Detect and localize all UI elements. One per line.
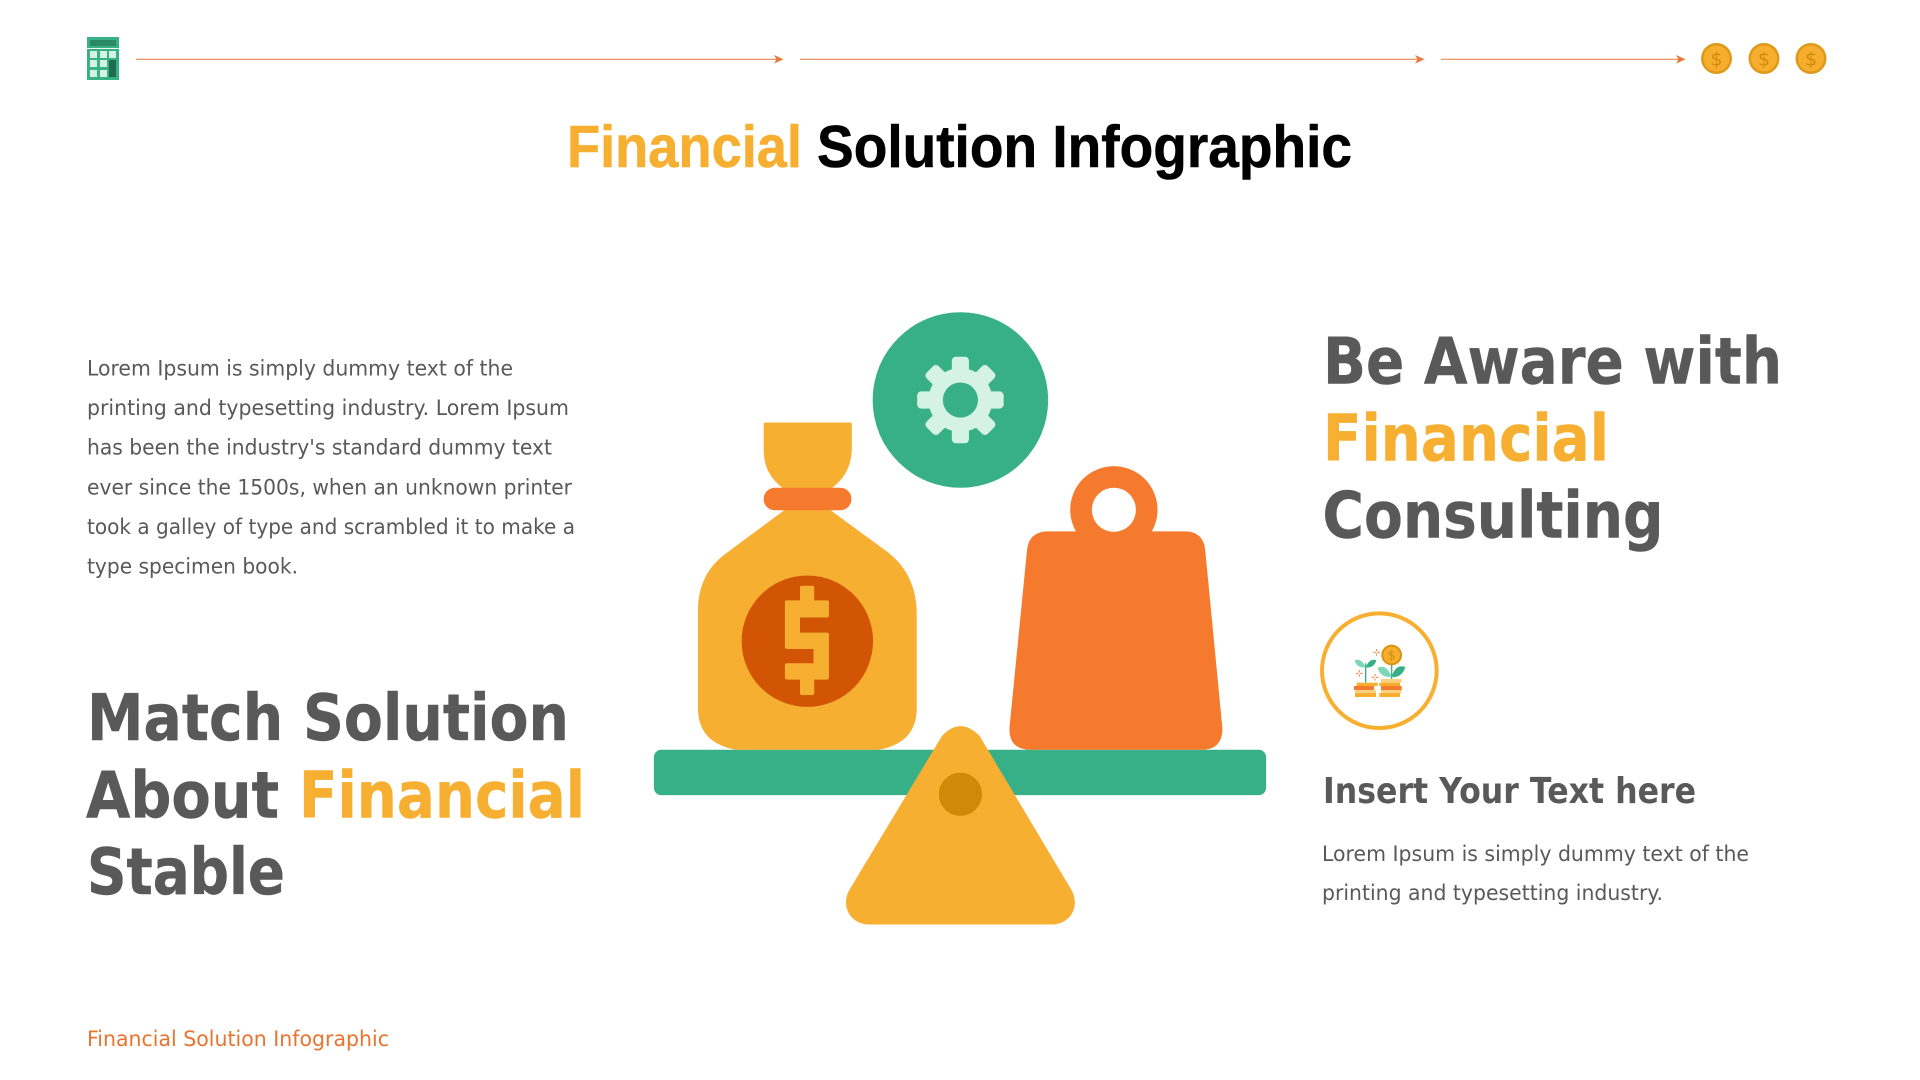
heading: be aware: Financial bbox=[1323, 402, 1609, 476]
icon: dollar coin 1 bbox=[1701, 43, 1732, 74]
text block: left paragraph: Lorem Ipsum is simply dummy text of the bbox=[87, 356, 513, 382]
icon: dollar coin 2: $ bbox=[1758, 48, 1770, 70]
icon: dollar coin 2 bbox=[1748, 43, 1780, 74]
text block: right paragraph: Lorem Ipsum is simply dummy text of the bbox=[1322, 842, 1749, 867]
heading: insert your text: Insert Your Text here bbox=[1323, 771, 1696, 812]
text block: left paragraph: ever since the 1500s, when an unknown printer bbox=[87, 475, 572, 500]
heading: match solution: Financial bbox=[299, 760, 585, 834]
icon: money bag bbox=[698, 422, 917, 750]
text block: right paragraph: printing and typesetting industry. bbox=[1322, 881, 1663, 906]
beam bbox=[654, 750, 1266, 795]
title: Solution Infographic bbox=[817, 114, 1352, 180]
heading: be aware: Consulting bbox=[1322, 480, 1664, 554]
illustration: balance scale bbox=[654, 312, 1266, 924]
icon: dollar coin 3: $ bbox=[1805, 48, 1817, 70]
icon: weight bbox=[1009, 466, 1222, 750]
icon: growing coins badge bbox=[1322, 613, 1437, 728]
icon: dollar coin 3 bbox=[1796, 43, 1826, 74]
fulcrum bbox=[846, 726, 1075, 924]
icon: growing coins badge: $ bbox=[1388, 648, 1396, 663]
footer label: Financial Solution Infographic bbox=[87, 1027, 389, 1052]
arrow: third header segment bbox=[1441, 55, 1686, 64]
arrow: first header segment bbox=[136, 55, 784, 64]
heading: match solution bbox=[86, 682, 585, 910]
title bbox=[567, 114, 1352, 180]
text block: left paragraph: printing and typesetting industry. Lorem Ipsum bbox=[87, 396, 569, 421]
heading: match solution: About bbox=[86, 760, 279, 834]
heading: match solution: Stable bbox=[87, 836, 285, 910]
text block: right paragraph bbox=[1322, 842, 1749, 906]
text block: left paragraph: has been the industry's standard dummy text bbox=[87, 436, 552, 461]
icon: dollar coin 1: $ bbox=[1710, 48, 1723, 70]
icon: calculator bbox=[87, 37, 119, 80]
text block: left paragraph: type specimen book. bbox=[87, 555, 298, 580]
text block: left paragraph bbox=[87, 356, 575, 580]
heading: be aware: Be Aware with bbox=[1323, 326, 1782, 400]
heading: be aware bbox=[1322, 326, 1782, 554]
arrow: second header segment bbox=[800, 55, 1424, 64]
title: Financial bbox=[567, 114, 802, 180]
text block: left paragraph: took a galley of type and scrambled it to make a bbox=[87, 515, 575, 540]
icon: gear badge bbox=[873, 312, 1048, 488]
heading: match solution: Match Solution bbox=[87, 682, 569, 756]
